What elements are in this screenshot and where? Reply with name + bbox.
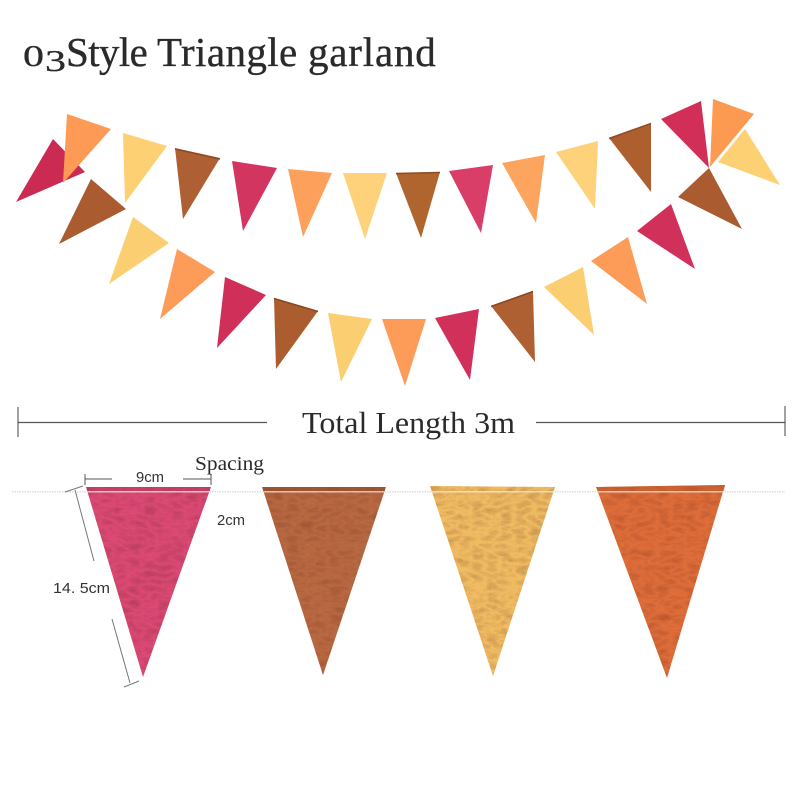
title: garland xyxy=(308,29,437,75)
height measurement: 14.5cm: 14. 5cm xyxy=(53,580,110,597)
spacing label: Spacing xyxy=(195,453,264,475)
pink pennant xyxy=(86,487,211,677)
stitch line xyxy=(12,491,785,493)
title: Style xyxy=(66,29,147,75)
height measurement: 14.5cm xyxy=(53,486,139,687)
orange pennant xyxy=(596,485,725,678)
lower garland xyxy=(59,168,742,386)
width measurement: 9cm: 9cm xyxy=(136,469,164,486)
width measurement: 9cm xyxy=(85,469,211,486)
spacing value: 2cm: 2cm xyxy=(217,512,245,529)
upper garland xyxy=(16,99,780,239)
yellow pennant xyxy=(430,486,555,676)
brown pennant xyxy=(262,487,386,675)
title: 3 xyxy=(45,43,66,78)
total length dimension: Total Length 3m xyxy=(302,405,515,440)
title: Triangle xyxy=(157,29,298,75)
title: 0 xyxy=(23,38,44,73)
title xyxy=(23,29,437,78)
